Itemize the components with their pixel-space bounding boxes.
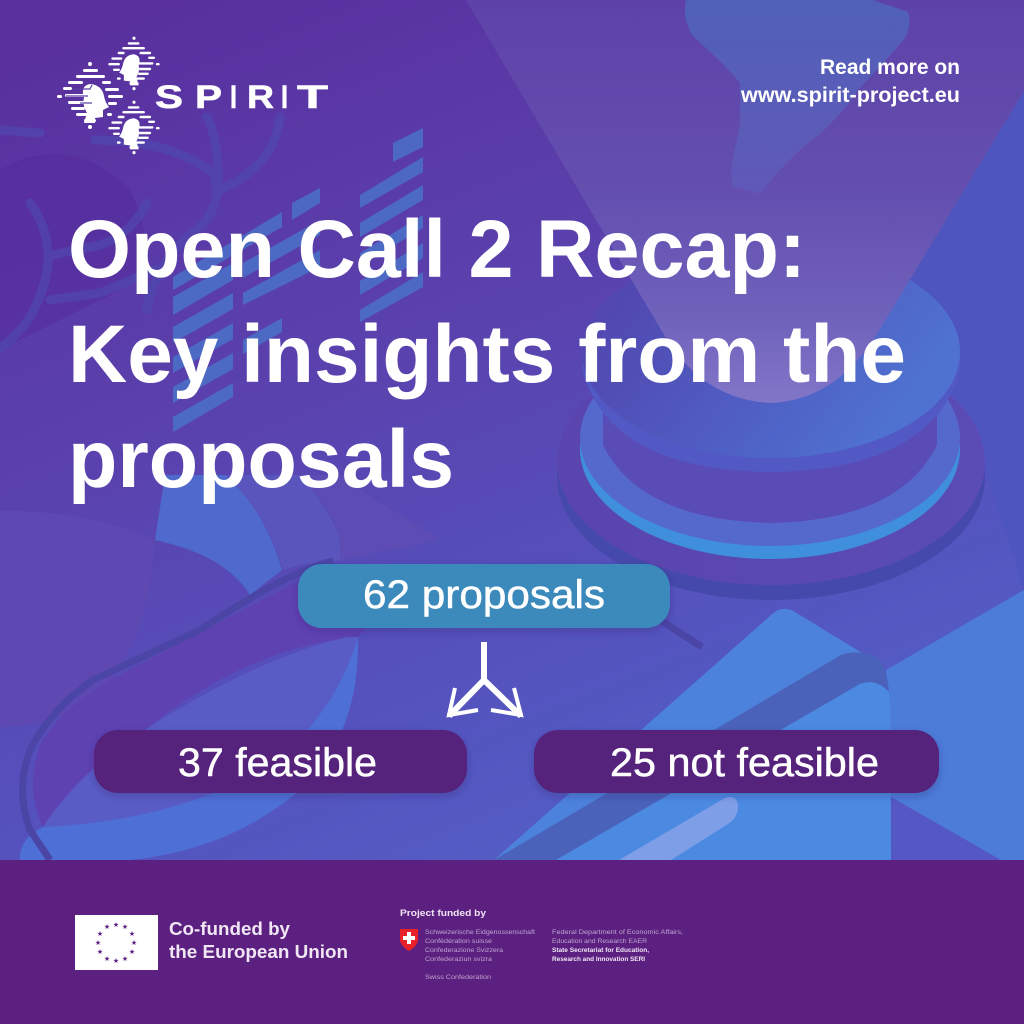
icon: head bottom	[108, 101, 160, 154]
icon: EU flag: ★	[97, 930, 103, 938]
icon: EU flag: ★	[104, 923, 110, 931]
Swiss names	[425, 929, 535, 981]
pill: 62 proposals: 62 proposals	[363, 573, 605, 617]
EU logo	[75, 915, 348, 970]
EU caption: the European Union	[169, 942, 348, 962]
device outline	[22, 561, 702, 860]
icon: EU flag: ★	[129, 930, 135, 938]
title	[68, 204, 906, 505]
icon: EU flag: ★	[95, 939, 101, 947]
department names: Federal Department of Economic Affairs,	[552, 929, 683, 936]
icon: EU flag: ★	[97, 948, 103, 956]
icon: head large	[57, 62, 123, 129]
Swiss names: Confédération suisse	[425, 938, 493, 945]
pill: 37 feasible	[94, 730, 467, 793]
outer disc	[557, 354, 985, 600]
Swiss funding block	[400, 908, 683, 981]
pill: 25 not feasible: 25 not feasible	[610, 741, 879, 785]
icon: EU flag: ★	[129, 948, 135, 956]
funding heading: Project funded by	[400, 908, 487, 919]
logo wordmark: P	[195, 79, 222, 115]
icon: EU flag: ★	[131, 939, 137, 947]
logo wordmark: I	[281, 79, 288, 115]
neck	[603, 380, 937, 523]
logo wordmark: T	[297, 79, 329, 115]
title: Open Call 2 Recap:	[68, 204, 806, 295]
icon: EU flag	[75, 915, 158, 970]
cyan ring	[580, 339, 960, 559]
icon: head top	[108, 37, 160, 90]
link text	[740, 56, 960, 107]
department names: State Secretariat for Education,	[552, 947, 649, 954]
logo: SPIRIT	[57, 37, 329, 154]
logo wordmark: S	[155, 79, 183, 115]
pill: 25 not feasible	[534, 730, 939, 793]
pill: 37 feasible: 37 feasible	[178, 741, 377, 785]
department names	[552, 929, 683, 963]
icon: Swiss shield	[400, 929, 418, 951]
icon: EU flag: ★	[113, 957, 119, 965]
department names: Education and Research EAER	[552, 938, 647, 945]
Swiss names: Confederaziun svizra	[425, 956, 493, 963]
logo wordmark: R	[247, 79, 274, 115]
link text: Read more on	[820, 56, 960, 79]
pill: 62 proposals	[298, 564, 670, 628]
footer band	[0, 860, 1024, 1024]
arrow: split into two	[449, 642, 521, 716]
map shape	[685, 0, 909, 194]
logo wordmark	[155, 79, 329, 115]
icon: EU flag: ★	[104, 955, 110, 963]
Swiss names: Schweizerische Eidgenossenschaft	[425, 929, 535, 936]
link text: www.spirit-project.eu	[740, 84, 960, 107]
Swiss names: Confederazione Svizzera	[425, 947, 504, 954]
Swiss names: Swiss Confederation	[425, 974, 492, 981]
icon: EU flag: ★	[113, 921, 119, 929]
logo wordmark: I	[230, 79, 237, 115]
device block	[494, 609, 891, 860]
bar chart backdrop	[173, 128, 423, 432]
device sheet	[20, 572, 400, 860]
department names: Research and Innovation SERI	[552, 956, 645, 963]
top disc	[583, 348, 960, 472]
title: Key insights from the	[68, 309, 906, 400]
EU caption	[169, 919, 348, 962]
EU caption: Co-funded by	[169, 919, 290, 939]
title: proposals	[68, 414, 454, 505]
icon: EU flag: ★	[122, 955, 128, 963]
cone of light	[466, 0, 1024, 403]
icon: EU flag: ★	[122, 923, 128, 931]
platform	[557, 246, 985, 600]
circuit curves	[0, 117, 280, 348]
